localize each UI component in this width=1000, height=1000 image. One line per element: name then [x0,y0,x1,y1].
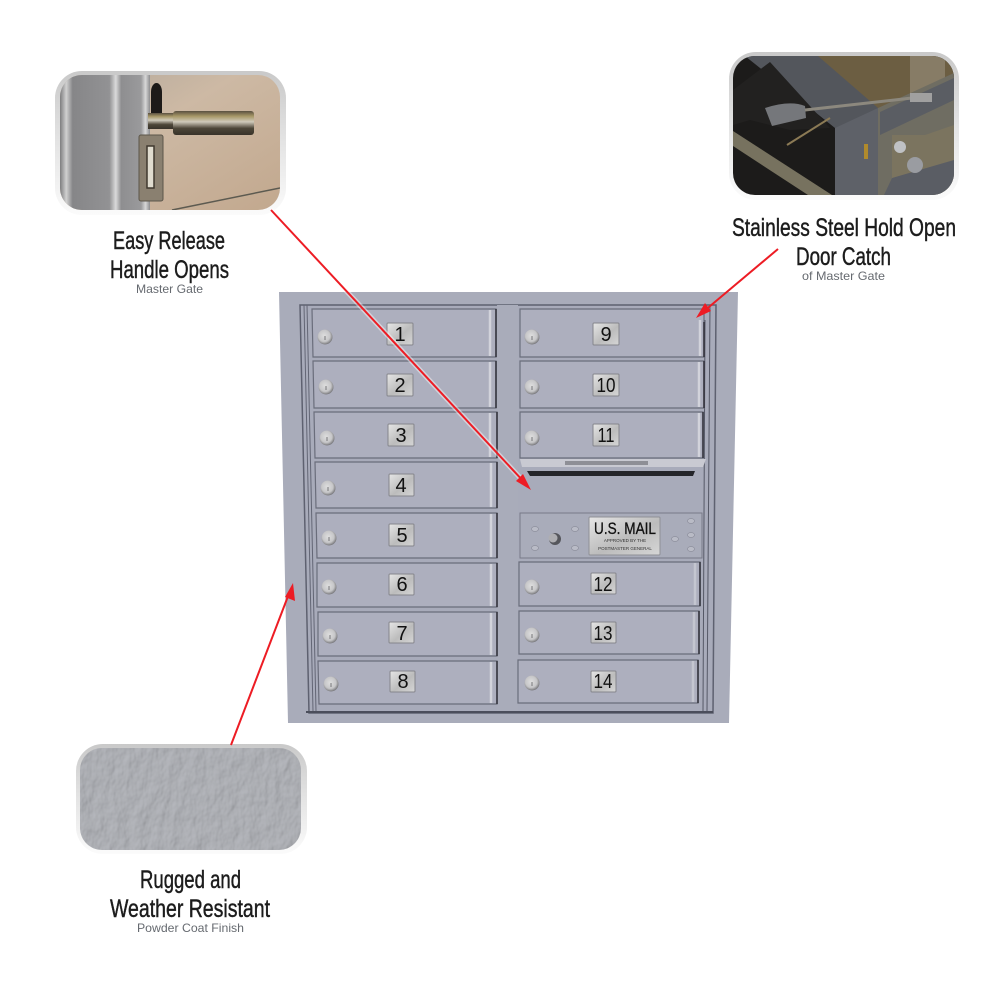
door 10 [520,361,704,408]
caption: powder coat: Powder Coat Finish [137,921,244,935]
door 8: 8 [397,671,409,693]
centre divider [497,305,518,711]
door 11: 11 [598,425,614,447]
photo: easy release handle [55,71,286,215]
door 1 [312,309,496,357]
caption: easy release handle: Easy Release [113,227,225,255]
door 9: 9 [600,324,612,346]
door 7 [318,612,497,656]
door 14 [518,660,698,703]
photo: door catch [729,52,959,200]
door 10: 10 [596,375,616,397]
U.S. mail panel [520,513,702,558]
caption: easy release handle: Handle Opens [110,256,229,284]
caption: door catch: Door Catch [796,243,891,271]
door 3: 3 [395,425,407,447]
door 6 [317,563,497,607]
door 5: 5 [396,525,408,547]
arrow: powder coat [231,583,295,745]
outgoing mail slot [520,459,706,476]
mailbox unit [279,292,738,723]
caption: powder coat: Rugged and [140,866,241,894]
door 2: 2 [394,375,406,397]
caption: powder coat: Weather Resistant [110,895,270,923]
door 13 [519,611,699,654]
door 8 [318,661,497,704]
U.S. mail panel: POSTMASTER GENERAL [598,546,652,551]
U.S. mail panel: U.S. MAIL [594,519,656,538]
door 3 [314,412,497,458]
door 7: 7 [396,623,408,645]
door 1: 1 [394,324,406,346]
caption: powder coat [110,866,270,935]
photo: powder coat texture [76,744,307,854]
door 6: 6 [396,574,408,596]
U.S. mail panel: APPROVED BY THE [604,538,646,543]
door 9 [520,309,704,357]
caption: door catch: of Master Gate [802,269,885,283]
arrow: door catch [696,249,778,318]
outer frame [279,292,738,723]
caption: easy release handle [110,227,229,296]
door 2 [313,361,496,408]
door 12: 12 [594,574,612,596]
door 11 [520,412,703,458]
door 5 [316,513,497,558]
door 4: 4 [395,475,407,497]
arrow: handle to unit [271,210,531,490]
door 14: 14 [594,671,612,693]
caption: easy release handle: Master Gate [136,282,203,296]
door 4 [315,462,497,508]
door 12 [519,562,700,606]
door 13: 13 [594,623,612,645]
caption: door catch [732,214,956,283]
